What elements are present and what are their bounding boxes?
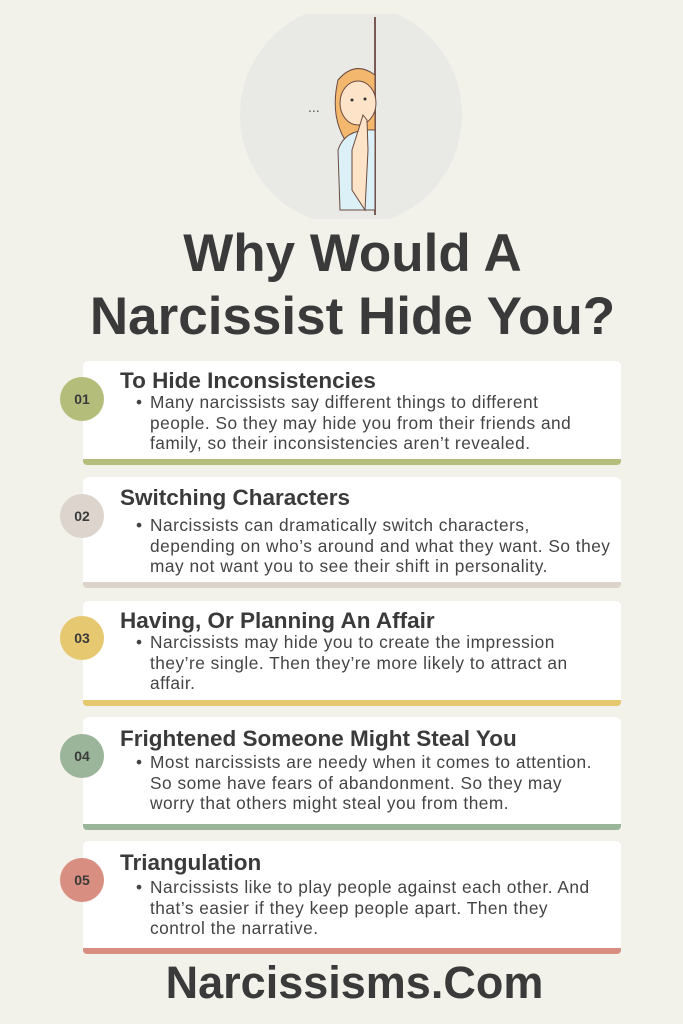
text 01	[150, 392, 571, 454]
text 05: that’s easier if they keep people apart. Then they	[150, 898, 548, 918]
heading 02: Switching Characters	[120, 485, 350, 510]
footer: Narcissisms.Com	[166, 957, 543, 1008]
text 03: they’re single. Then they’re more likely to attract an	[150, 652, 568, 672]
text 04: So some have fears of abandonment. So they may	[150, 772, 562, 792]
badge 03: 03	[74, 630, 90, 646]
text 04	[150, 752, 592, 814]
title: Narcissist Hide You?	[90, 287, 615, 346]
text 02: Narcissists can dramatically switch characters,	[150, 515, 530, 535]
badge 05: 05	[74, 872, 90, 888]
text 02: may not want you to see their shift in personality.	[150, 556, 548, 576]
badge 05	[60, 858, 104, 902]
title: Why Would A	[183, 224, 522, 283]
heading 05: Triangulation	[120, 850, 261, 875]
text 01: people. So they may hide you from their friends and	[150, 412, 571, 432]
text 02	[150, 515, 610, 576]
text 01: Many narcissists say different things to different	[150, 392, 538, 412]
text 05	[150, 877, 590, 938]
text 04: worry that others might steal you from them.	[150, 793, 509, 813]
badge 02	[60, 494, 104, 538]
text 01: family, so their inconsistencies aren’t revealed.	[150, 433, 531, 453]
text 03: Narcissists may hide you to create the impression	[150, 632, 555, 652]
badge 04	[60, 734, 104, 778]
illustration: hiding woman: ...	[308, 99, 320, 115]
badge 04: 04	[74, 748, 90, 764]
panel: 02	[83, 477, 621, 588]
badge 01: 01	[74, 391, 90, 407]
text 03	[150, 632, 568, 694]
text 02: depending on who’s around and what they want. So they	[150, 536, 610, 556]
badge 02: 02	[74, 508, 90, 524]
title	[90, 224, 615, 346]
text 04: Most narcissists are needy when it comes to attention.	[150, 752, 592, 772]
panel: 03	[83, 601, 621, 706]
text 05: Narcissists like to play people against each other. And	[150, 877, 590, 897]
panel: 01	[83, 361, 621, 465]
text 05: control the narrative.	[150, 918, 319, 938]
badge 01	[60, 377, 104, 421]
panel: 04	[83, 717, 621, 830]
heading 01: To Hide Inconsistencies	[120, 368, 376, 393]
heading 03: Having, Or Planning An Affair	[120, 608, 435, 633]
heading 04: Frightened Someone Might Steal You	[120, 726, 517, 751]
badge 03	[60, 616, 104, 660]
illustration: hiding woman	[240, 14, 462, 219]
panel: 05	[83, 841, 621, 954]
text 03: affair.	[150, 673, 195, 693]
